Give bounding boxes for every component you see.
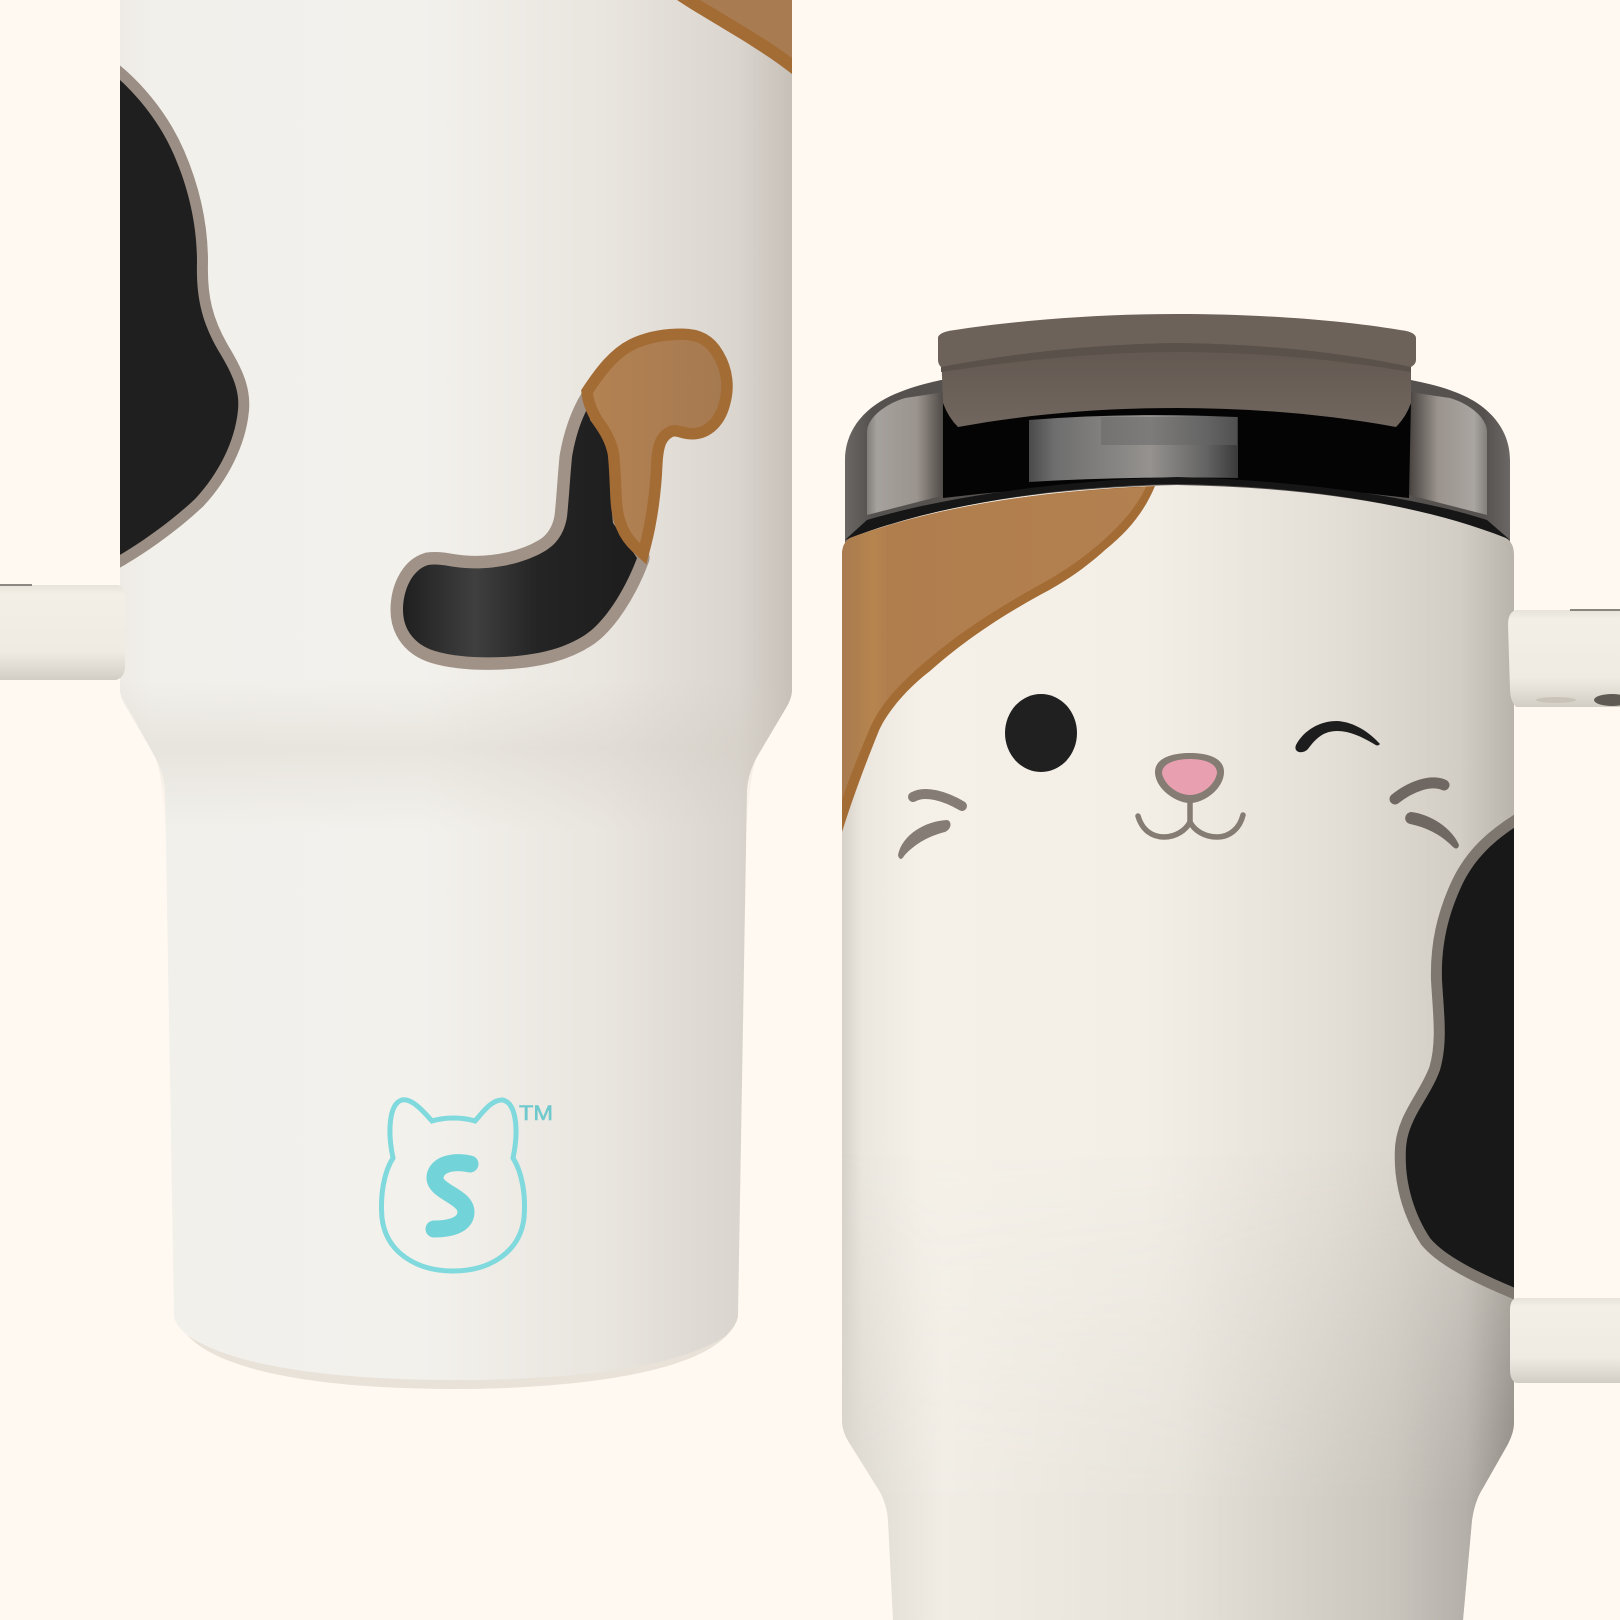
lid: clear dark collar xyxy=(845,380,1510,545)
left whiskers xyxy=(898,794,962,859)
metal cylinder xyxy=(1029,415,1238,482)
handle of left tumbler xyxy=(0,584,125,680)
S letter xyxy=(434,1163,470,1229)
black patch on right side xyxy=(1406,818,1530,1294)
nose xyxy=(1155,753,1224,803)
right tumbler body xyxy=(842,485,1514,1620)
upper handle of right tumbler xyxy=(1508,609,1620,707)
black patch on left side xyxy=(100,64,238,566)
cat face xyxy=(898,694,1459,859)
winking eye xyxy=(1295,721,1380,752)
left tumbler: back view xyxy=(0,0,792,1389)
lower rim of lid xyxy=(845,477,1510,540)
right whiskers xyxy=(1395,783,1459,848)
right tumbler: cat face view xyxy=(842,314,1620,1620)
lid: taupe flip cap xyxy=(938,314,1416,427)
right glass window xyxy=(1409,392,1487,515)
tail tan section xyxy=(593,340,721,543)
cat head outline xyxy=(381,1100,525,1271)
lower handle of right tumbler xyxy=(1510,1298,1620,1383)
mouth xyxy=(1138,800,1243,837)
trademark: TM xyxy=(519,1102,553,1125)
black inner band xyxy=(943,400,1411,498)
tail black section xyxy=(403,400,637,657)
tan patch at top right of left tumbler xyxy=(677,0,792,74)
left glass window xyxy=(867,392,945,515)
tail marking xyxy=(403,340,721,657)
logo: cat head outline with S xyxy=(381,1100,553,1271)
left tumbler body xyxy=(120,0,792,1389)
tan head patch xyxy=(842,486,1155,832)
open eye xyxy=(1005,694,1077,772)
